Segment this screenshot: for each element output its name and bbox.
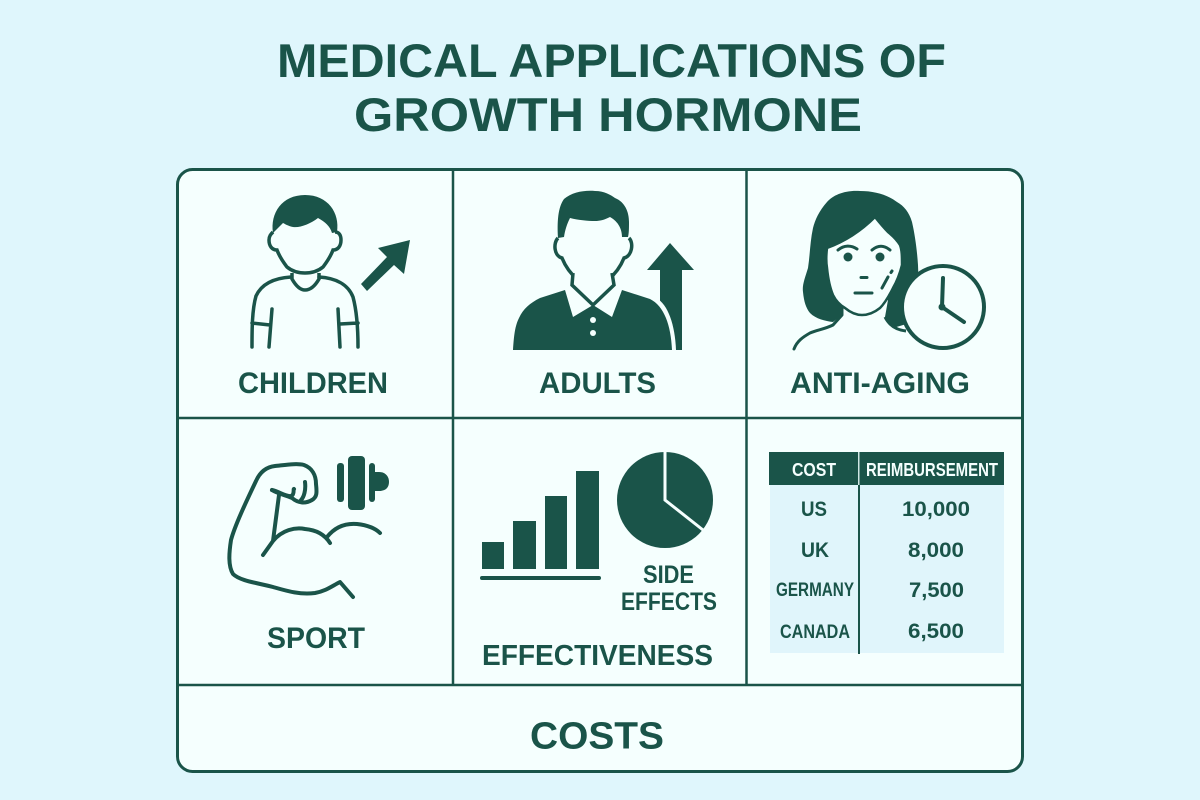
table header: REIMBURSEMENT <box>866 460 998 480</box>
icon: adult with up arrow <box>513 191 694 350</box>
pie chart <box>617 451 713 548</box>
panel: sport <box>229 456 389 655</box>
title: GROWTH HORMONE <box>354 89 862 142</box>
panel: anti-aging <box>790 191 984 400</box>
table rows: US <box>801 498 827 521</box>
panel: effectiveness and side effects <box>480 451 717 672</box>
icon: woman's face with clock <box>794 191 984 349</box>
table rows: 6,500 <box>908 620 964 643</box>
table header <box>769 452 1004 485</box>
bar chart <box>480 471 601 580</box>
label: effectiveness: EFFECTIVENESS <box>482 640 713 672</box>
label: side effects <box>621 561 717 616</box>
panel: grid frame <box>178 170 1022 772</box>
table header: COST <box>792 460 836 480</box>
icon: flexed arm with dumbbell <box>229 456 389 597</box>
label: anti-aging: ANTI-AGING <box>790 367 970 400</box>
table background <box>770 485 1004 653</box>
table rows: 8,000 <box>908 539 964 562</box>
panel: cost table <box>769 452 1004 654</box>
label: side effects: SIDE <box>643 561 694 589</box>
table rows: 7,500 <box>909 579 964 602</box>
label: side effects: EFFECTS <box>621 588 717 616</box>
label: sport: SPORT <box>267 622 365 655</box>
table rows: 10,000 <box>902 498 970 521</box>
panel: costs footer label: COSTS <box>530 716 664 758</box>
table rows: GERMANY <box>776 580 854 601</box>
label: adults: ADULTS <box>539 367 656 400</box>
panel: children <box>238 195 410 400</box>
table rows: UK <box>801 539 829 562</box>
table rows <box>776 498 970 643</box>
panel: adults <box>513 191 694 400</box>
icon: child with diagonal arrow <box>252 195 410 347</box>
title <box>277 35 946 142</box>
label: children: CHILDREN <box>238 367 388 400</box>
table rows: CANADA <box>780 622 850 643</box>
title: MEDICAL APPLICATIONS OF <box>277 35 946 88</box>
